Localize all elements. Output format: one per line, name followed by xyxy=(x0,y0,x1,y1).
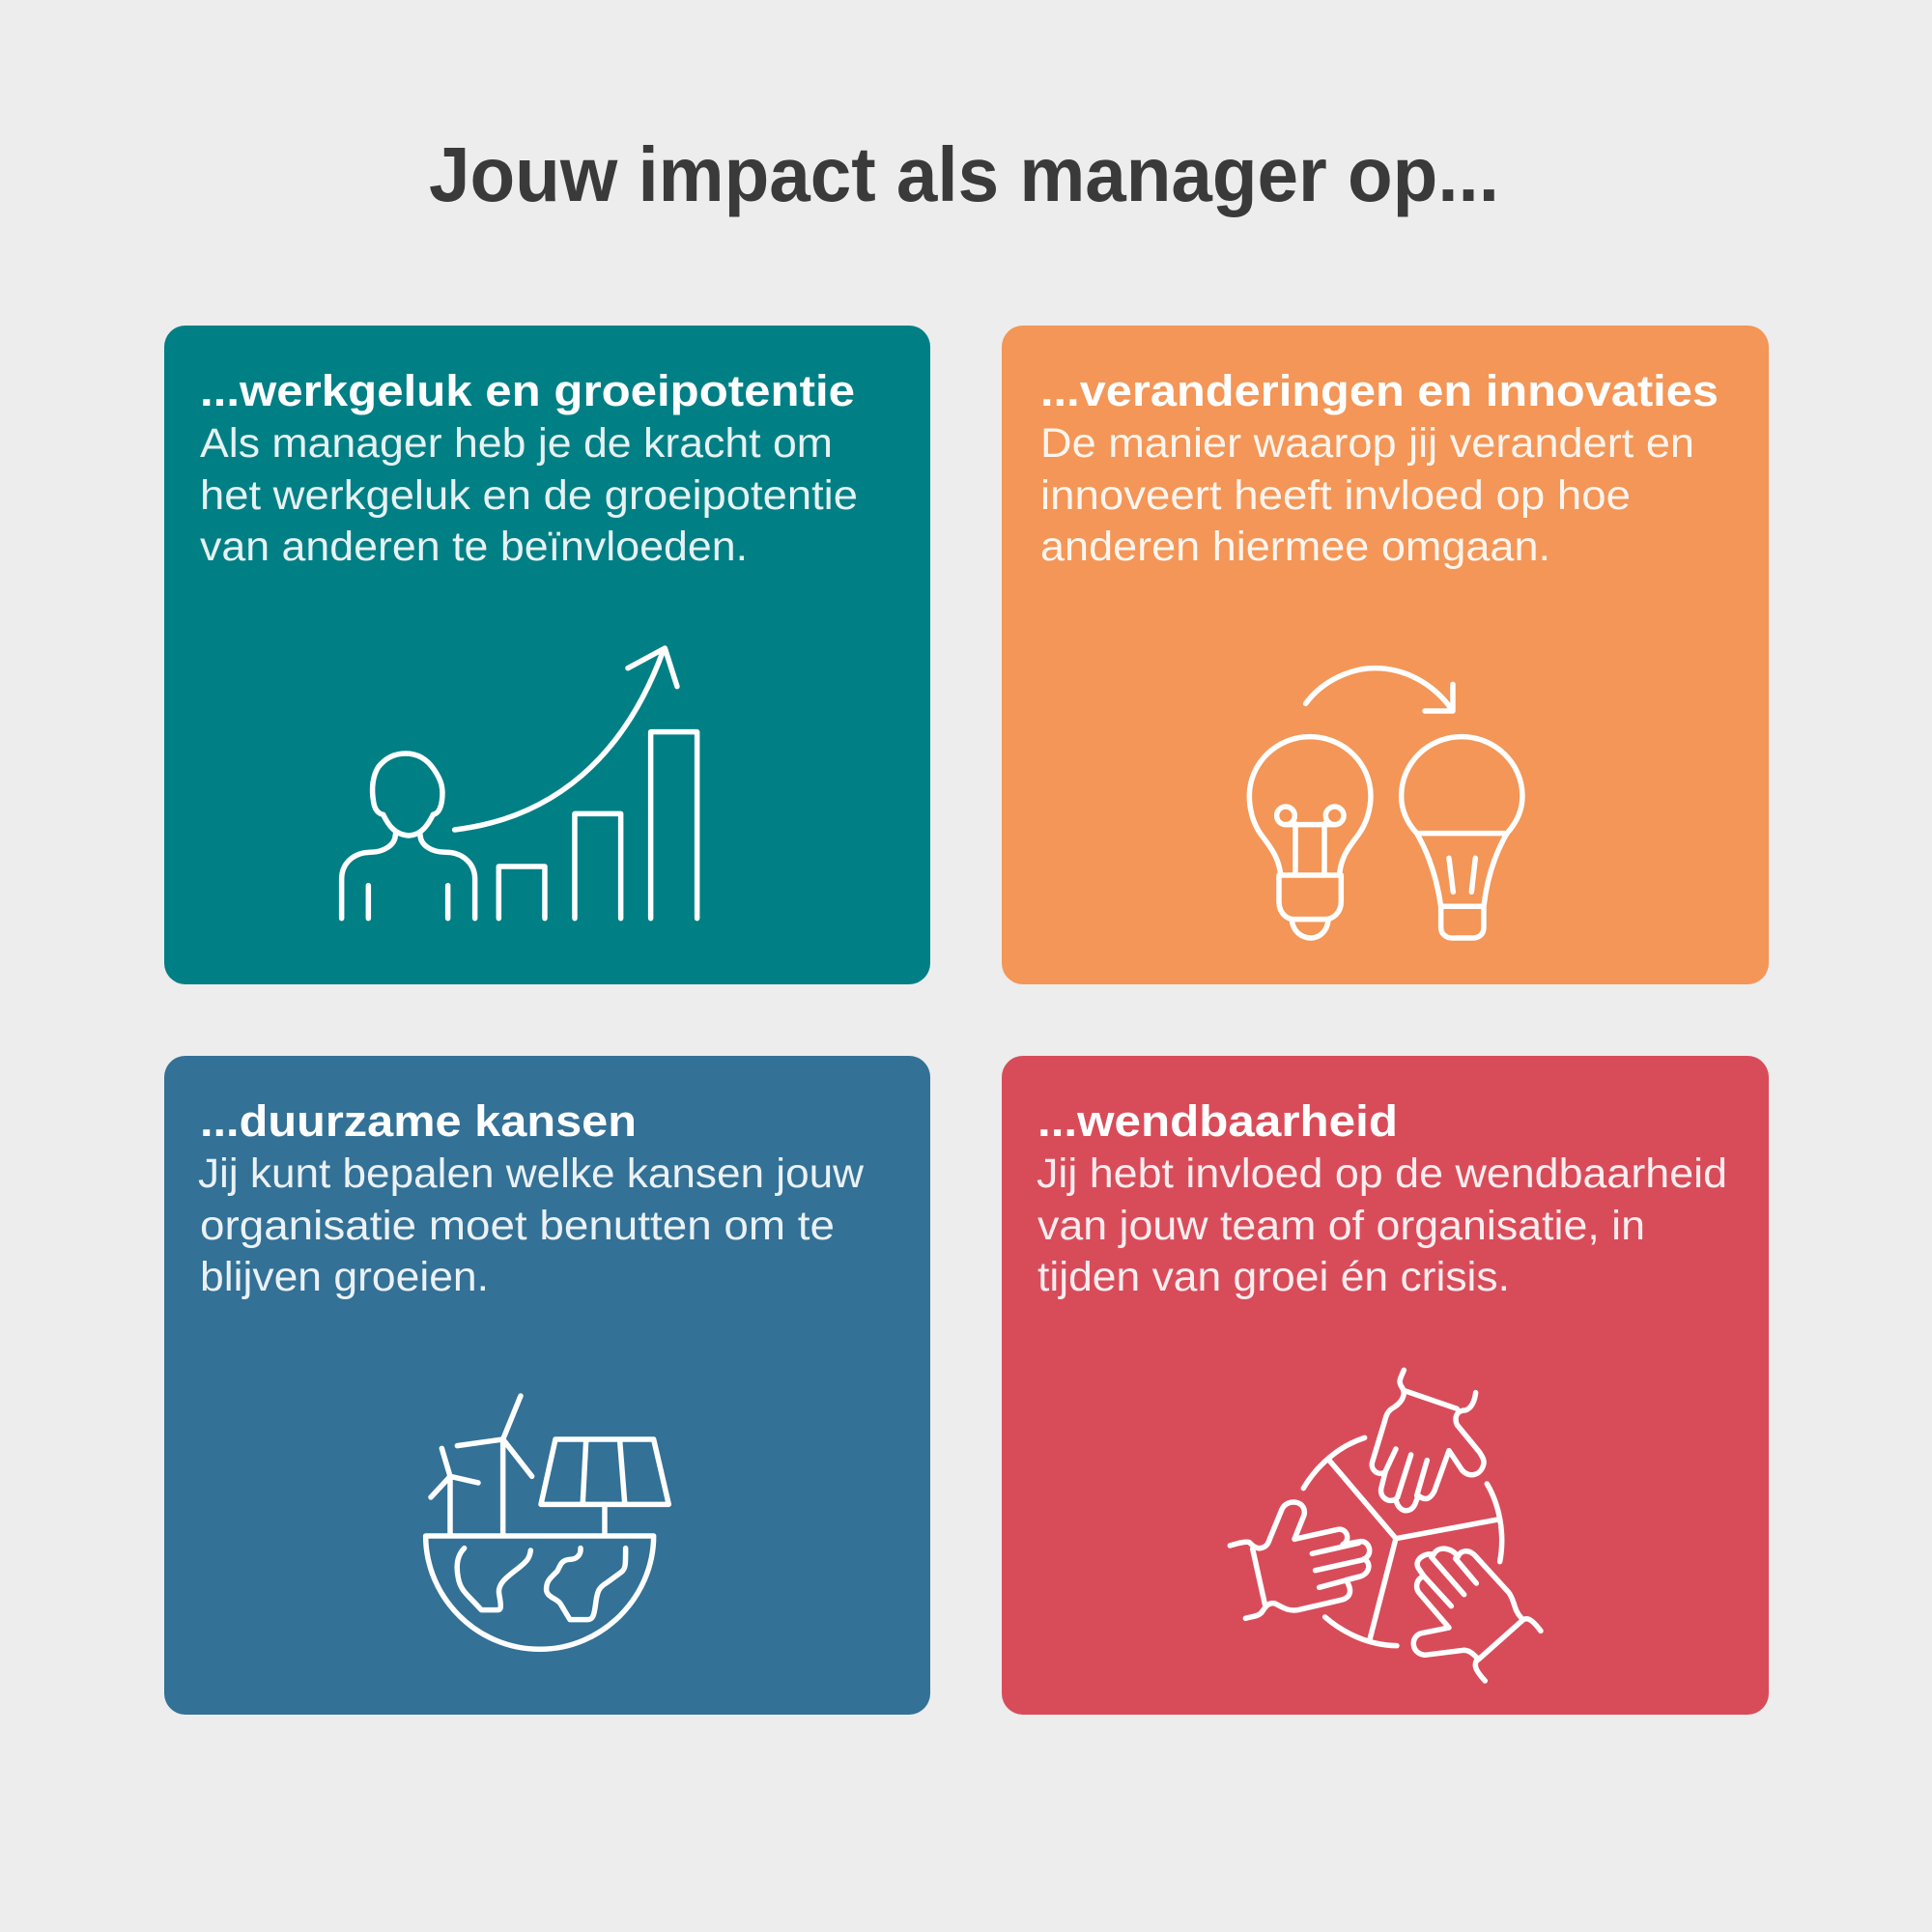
heading: wendbaarheid: ...wendbaarheid xyxy=(1037,1096,1398,1146)
panel background: red xyxy=(1002,1056,1769,1715)
text block: duurzame kansen: blijven groeien. xyxy=(200,1255,489,1300)
panel background: orange xyxy=(1002,326,1769,984)
text block: werkgeluk: Als manager heb je de kracht om xyxy=(200,421,833,467)
text block: duurzame kansen: organisatie moet benutten om te xyxy=(200,1204,835,1249)
text block: werkgeluk: van anderen te beïnvloeden. xyxy=(200,525,748,570)
text block: veranderingen: De manier waarop jij verandert en xyxy=(1040,421,1694,467)
panel: werkgeluk en groeipotentie xyxy=(164,326,930,984)
text block: wendbaarheid: tijden van groei én crisis. xyxy=(1037,1255,1510,1300)
panel: wendbaarheid xyxy=(1002,1056,1769,1715)
text block: veranderingen: anderen hiermee omgaan. xyxy=(1040,525,1550,570)
text block: duurzame kansen xyxy=(198,1151,864,1300)
heading: duurzame kansen: ...duurzame kansen xyxy=(200,1096,637,1146)
text block: wendbaarheid xyxy=(1037,1151,1727,1300)
title: Jouw impact als manager op... xyxy=(429,131,1499,217)
heading: werkgeluk: ...werkgeluk en groeipotentie xyxy=(200,366,855,415)
icon: two light bulbs with arrow xyxy=(1249,668,1522,938)
icon: wind turbines, solar panel and globe xyxy=(426,1396,668,1649)
panel background: teal xyxy=(164,326,930,984)
text block: veranderingen xyxy=(1040,421,1694,570)
heading: veranderingen: ...veranderingen en innovaties xyxy=(1040,366,1719,415)
panel background: blue xyxy=(164,1056,930,1715)
icon: person with growing bar chart and arrow xyxy=(342,648,697,919)
text block: wendbaarheid: van jouw team of organisatie, in xyxy=(1037,1204,1645,1249)
text block: wendbaarheid: Jij hebt invloed op de wendbaarheid xyxy=(1037,1151,1727,1197)
text block: veranderingen: innoveert heeft invloed op hoe xyxy=(1040,473,1631,519)
text block: werkgeluk: het werkgeluk en de groeipotentie xyxy=(200,473,858,519)
icon: three hands around a circle xyxy=(1230,1370,1541,1681)
text block: werkgeluk xyxy=(200,421,858,570)
panel: duurzame kansen xyxy=(164,1056,930,1715)
text block: duurzame kansen: Jij kunt bepalen welke kansen jouw xyxy=(198,1151,864,1197)
panel: veranderingen en innovaties xyxy=(1002,326,1769,984)
